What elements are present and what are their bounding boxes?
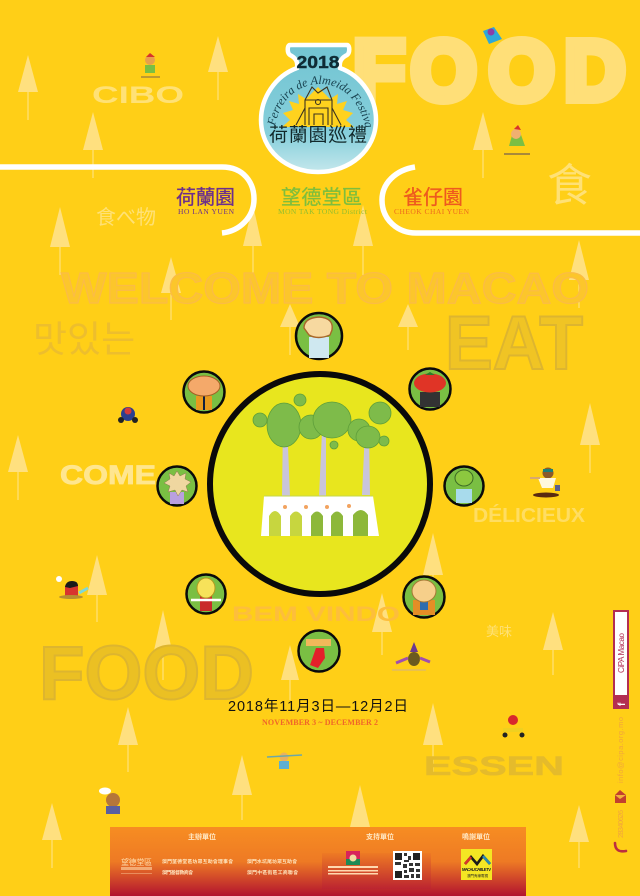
supporters heading: 支持單位 bbox=[366, 832, 394, 841]
organiser names bbox=[162, 858, 298, 876]
word: food in Chinese: 食 bbox=[547, 160, 592, 211]
word: FOOD lower left: FOOD bbox=[39, 631, 254, 716]
character: green vegetable bbox=[444, 466, 484, 506]
tourism office logo bbox=[328, 851, 378, 874]
word: EAT: EAT bbox=[445, 301, 583, 386]
district: Ho Lan Yuen: 荷蘭園 bbox=[176, 186, 235, 209]
logo Chinese title: 荷蘭園巡禮 bbox=[269, 124, 367, 146]
mascot: left lower bbox=[56, 576, 88, 599]
mascot: right middle bbox=[530, 468, 560, 498]
mascot: top left bbox=[141, 53, 160, 77]
mascot: left middle bbox=[118, 407, 138, 423]
character: bun worker bbox=[404, 576, 444, 618]
right white curve bbox=[382, 167, 640, 233]
organiser names: 澳門水坑尾坊眾互助會 bbox=[247, 858, 297, 865]
email contact: info@cipa.org.mo bbox=[616, 717, 625, 783]
email contact bbox=[615, 717, 626, 803]
logo year: 2018 bbox=[296, 52, 340, 72]
tree canopies bbox=[253, 394, 391, 449]
Facebook widget: CiPA Macao bbox=[617, 632, 626, 673]
word: welcome to Macao: WELCOME TO MACAO bbox=[61, 264, 589, 313]
logo sun rays bbox=[282, 87, 354, 127]
word: Chinese delicious: 美味 bbox=[486, 624, 512, 639]
district: Cheok Chai Yuen: CHEOK CHAI YUEN bbox=[394, 207, 470, 216]
date: 2018年11月3日—12月2日 bbox=[228, 698, 408, 715]
mascot: bottom left bbox=[99, 788, 120, 814]
mascot: scooter bbox=[502, 715, 524, 738]
arcade building bbox=[261, 496, 379, 536]
phone contact bbox=[615, 810, 626, 851]
district: Ho Lan Yuen: HO LAN YUEN bbox=[178, 207, 235, 216]
character: chili bbox=[298, 630, 340, 672]
phone contact: 28340626 bbox=[616, 810, 625, 838]
organiser names: 澳門望德堂區坊眾互助會理事會 bbox=[162, 858, 233, 865]
logo church bbox=[296, 87, 341, 125]
mascot: bird bbox=[392, 642, 430, 670]
word: come: COME bbox=[60, 460, 156, 490]
Facebook widget bbox=[613, 610, 629, 709]
mascot: top right flyer bbox=[483, 27, 502, 44]
mascots bbox=[56, 27, 560, 814]
organiser names: 澳門中區街區工商聯會 bbox=[247, 869, 298, 876]
word: Korean delicious: 맛있는 bbox=[33, 319, 135, 360]
organiser logo bbox=[121, 857, 152, 874]
festival logo bbox=[258, 42, 378, 174]
character: tomato bbox=[410, 368, 450, 410]
character: bread chef bbox=[296, 313, 342, 359]
mascot: blue lower bbox=[267, 752, 302, 769]
Macau Cable logo bbox=[461, 849, 492, 880]
tree trunks bbox=[282, 422, 370, 496]
organiser logo: 望德堂區 bbox=[121, 857, 152, 867]
district: Cheok Chai Yuen: 雀仔園 bbox=[403, 186, 463, 209]
word: FOOD top right: FOOD bbox=[354, 24, 625, 118]
word: Cibo: CIBO bbox=[92, 82, 184, 109]
date in English: NOVEMBER 3 ~ DECEMBER 2 bbox=[262, 718, 378, 727]
sponsors footer bbox=[110, 827, 526, 896]
mascot: upper right bbox=[504, 125, 530, 154]
district: Mon Tak Tong: 望德堂區 bbox=[281, 186, 362, 209]
word: delicieux: DÉLICIEUX bbox=[473, 504, 586, 527]
character: potato in suit bbox=[184, 372, 224, 412]
character: spiky head bbox=[158, 466, 196, 506]
word: essen: ESSEN bbox=[424, 751, 564, 781]
organisers heading: 主辦單位 bbox=[188, 832, 216, 841]
central circle illustration bbox=[210, 374, 430, 594]
district: Mon Tak Tong bbox=[278, 186, 368, 216]
Facebook widget: f bbox=[617, 702, 628, 706]
character: blond waiter bbox=[186, 574, 226, 614]
thanks heading: 鳴謝單位 bbox=[462, 832, 490, 841]
organiser names: 澳門基督教商會 bbox=[162, 869, 193, 876]
word: food in Japanese: 食べ物 bbox=[96, 206, 156, 229]
district: Mon Tak Tong: MON TAK TONG District bbox=[278, 207, 368, 216]
left white curve bbox=[0, 167, 254, 233]
QR code bbox=[393, 851, 422, 880]
support panel bbox=[322, 853, 431, 889]
district: Cheok Chai Yuen bbox=[394, 186, 470, 216]
Macau Cable logo: MACAU CABLE TV bbox=[462, 867, 491, 872]
Macau Cable logo: 澳門有線電視 bbox=[467, 873, 488, 878]
word: bem vindo: BEM VINDO bbox=[232, 603, 400, 626]
